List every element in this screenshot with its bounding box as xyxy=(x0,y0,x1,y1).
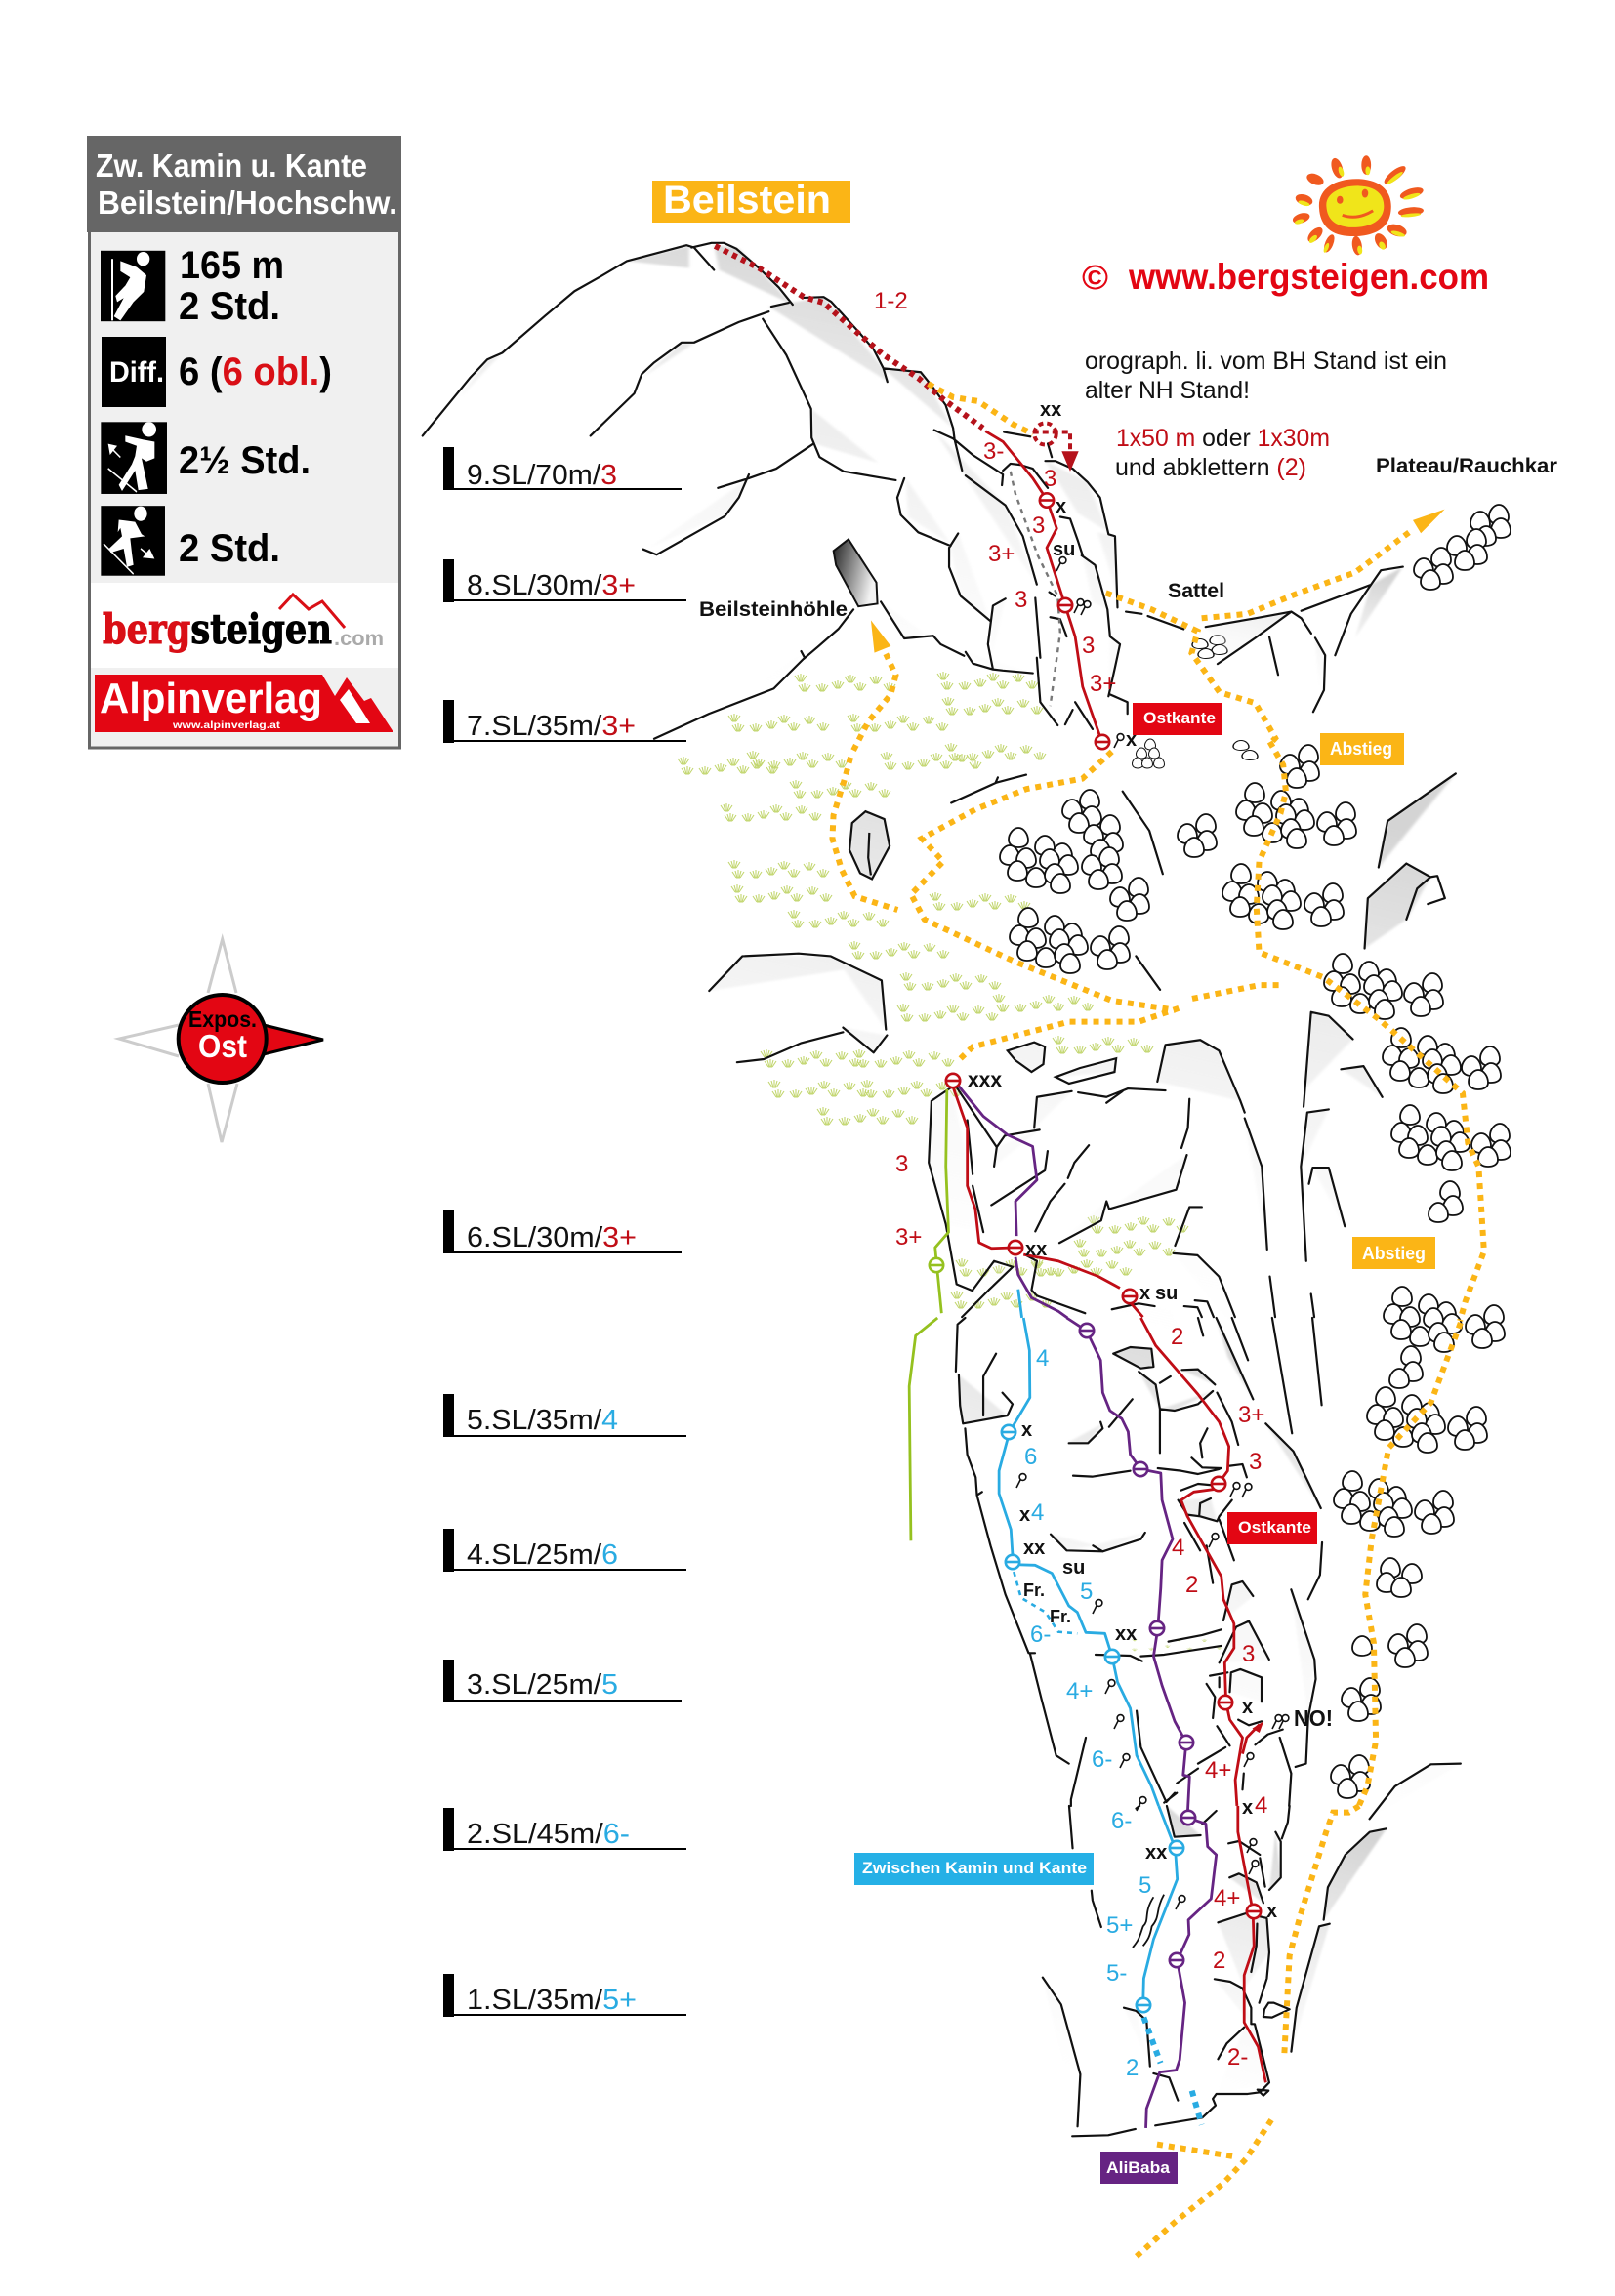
pitch 3 xyxy=(443,1660,682,1702)
blue grades: 5 xyxy=(1080,1578,1093,1605)
place labels xyxy=(699,455,1557,1731)
anchor and terrain marks: su xyxy=(1062,1557,1085,1578)
red grades: 3+ xyxy=(1090,671,1116,697)
red grades: 3 xyxy=(1249,1449,1262,1475)
tag: AliBaba: AliBaba xyxy=(1106,2158,1171,2177)
panel title: Beilstein/Hochschw. xyxy=(98,184,397,221)
grass patches xyxy=(678,672,1222,1651)
blue grades xyxy=(1024,1345,1151,2081)
route cyan start xyxy=(1018,1290,1022,1318)
icon: descent xyxy=(101,506,165,576)
icon: difficulty xyxy=(102,337,166,407)
panel title xyxy=(96,147,397,221)
red grades: 4 xyxy=(1255,1792,1267,1819)
pitch 2: 2.SL/45m/ 6- xyxy=(467,1819,630,1850)
icon: ascent xyxy=(101,422,167,494)
red grades: 2 xyxy=(1213,1948,1225,1974)
anchor and terrain marks: xx xyxy=(1115,1623,1137,1645)
route upper red xyxy=(985,431,1101,741)
anchor and terrain marks: x xyxy=(1242,1697,1253,1718)
red grades: 2 xyxy=(1185,1572,1198,1598)
compass text: Ost xyxy=(198,1028,247,1064)
note: old belay xyxy=(1085,348,1447,404)
saddle rock lines xyxy=(1106,510,1445,745)
descent time: 2 Std. xyxy=(179,527,280,570)
logo: Alpinverlag: Alpinverlag xyxy=(100,675,322,722)
cyan variant dashed xyxy=(1014,1572,1077,1633)
pitch 9 xyxy=(443,447,682,491)
red grades: 3 xyxy=(895,1151,908,1177)
path to plateau xyxy=(1202,510,1445,618)
icon: sun logo xyxy=(1292,155,1425,256)
cyan approach dots xyxy=(1143,2018,1202,2125)
compass text xyxy=(188,1006,257,1064)
red grades: 1-2 xyxy=(874,288,908,314)
compass: exposition east xyxy=(119,939,323,1142)
belay stations xyxy=(930,493,1261,2012)
boulders xyxy=(1000,505,1511,1798)
anchor and terrain marks: su xyxy=(1155,1283,1178,1304)
rappel marker xyxy=(1033,423,1079,472)
pitch 6 xyxy=(443,1210,682,1253)
blue grades: 6- xyxy=(1111,1808,1132,1834)
panel background xyxy=(90,138,400,748)
note: rappel xyxy=(1115,425,1330,481)
compass disc xyxy=(179,995,267,1083)
tag: Zwischen Kamin und Kante xyxy=(854,1853,1094,1885)
tag: Abstieg lower xyxy=(1352,1237,1435,1269)
route red middle xyxy=(951,1082,1143,1317)
difficulty value: 6 (6 obl.) xyxy=(179,350,332,393)
anchor and terrain marks: xx xyxy=(1040,399,1061,421)
pitch 8: 8.SL/30m/3+ xyxy=(467,570,636,601)
route green variant xyxy=(935,1089,948,1313)
compass east pointer xyxy=(264,1025,323,1054)
pitch 1: 1.SL/35m/5+ xyxy=(467,1985,637,2016)
anchor and terrain marks: x xyxy=(1242,1797,1253,1819)
red grades: 3 xyxy=(1082,633,1095,659)
route green lower xyxy=(909,1318,937,1540)
panel header xyxy=(87,136,401,232)
compass star points xyxy=(119,939,237,1142)
anchor and terrain marks: x xyxy=(1126,729,1137,751)
red grades: 2- xyxy=(1227,2044,1248,2070)
approach dotted paths xyxy=(832,742,1484,1321)
anchor and terrain marks: xx xyxy=(1145,1842,1167,1864)
tag: Ostkante lower xyxy=(1227,1512,1317,1544)
logo: bergsteigen.com: bergsteigen xyxy=(103,605,332,653)
anchor and terrain marks: x xyxy=(1139,1283,1150,1304)
route red base xyxy=(1238,1806,1265,2082)
logo: Alpinverlag: www.alpinverlag.at xyxy=(172,719,281,731)
red grades: 3+ xyxy=(988,541,1015,567)
red grades: 3 xyxy=(1015,587,1027,613)
tag: Zwischen Kamin und Kante: Zwischen Kamin und Kante xyxy=(862,1859,1087,1877)
tag: Abstieg lower: Abstieg xyxy=(1362,1244,1426,1263)
red grades: 4+ xyxy=(1205,1757,1231,1784)
pitch 1 xyxy=(443,1974,686,2017)
blue grades: 6- xyxy=(1092,1746,1112,1773)
logo: bergsteigen.com: .com xyxy=(334,628,384,650)
anchor and terrain marks: x xyxy=(1021,1419,1032,1441)
anchor and terrain marks: xx xyxy=(1025,1239,1047,1260)
lower rock face xyxy=(909,1318,1461,1819)
note: old belay: alter NH Stand! xyxy=(1085,377,1250,404)
climb length and time: 165 m xyxy=(180,244,284,287)
alternative grey variant xyxy=(1011,472,1060,706)
arrow to cave xyxy=(853,620,895,751)
route cyan base xyxy=(1143,1806,1178,2004)
pitch 7 xyxy=(443,700,686,743)
blue grades: 5 xyxy=(1139,1872,1151,1899)
anchor and terrain marks: Fr. xyxy=(1023,1580,1045,1600)
bolts xyxy=(1016,557,1289,1909)
pitch 2 xyxy=(443,1808,686,1851)
blue grades: 6 xyxy=(1024,1444,1037,1470)
icon: climber xyxy=(101,251,165,321)
upper rock face xyxy=(423,243,1128,751)
crack lines xyxy=(1133,1895,1164,1948)
anchor and terrain marks: Fr. xyxy=(1050,1607,1071,1626)
anchor and terrain marks: x xyxy=(1019,1504,1030,1526)
tag: Ostkante upper xyxy=(1133,703,1222,735)
anchor and terrain marks: x xyxy=(1266,1901,1277,1922)
blue grades: 2 xyxy=(1126,2055,1139,2081)
red grades: 4+ xyxy=(1214,1885,1240,1911)
logo: Alpinverlag xyxy=(95,675,393,732)
descent dotted base xyxy=(1133,1806,1359,2260)
pitch 4: 4.SL/25m/6 xyxy=(467,1539,618,1571)
info panel xyxy=(87,136,401,748)
summit ridge dotted red xyxy=(715,246,983,429)
place labels: NO! xyxy=(1294,1705,1333,1731)
blue grades: 6- xyxy=(1030,1621,1051,1648)
Beilstein cave xyxy=(834,539,878,606)
note: rappel: und abklettern (2) xyxy=(1115,454,1306,481)
place labels: Beilsteinhöhle xyxy=(699,598,848,621)
red grades xyxy=(874,288,1267,2070)
place labels: Plateau/Rauchkar xyxy=(1376,455,1557,477)
route cyan middle xyxy=(999,1318,1159,1806)
pitch 8 xyxy=(443,559,686,602)
website credit: © xyxy=(1082,259,1108,297)
red grades: 3 xyxy=(1242,1641,1255,1667)
note: rappel: 1x50 m oder 1x30m xyxy=(1116,425,1330,452)
anchor and terrain marks: su xyxy=(1053,539,1075,560)
red grades: 3 xyxy=(1044,466,1056,492)
wrong way arrow xyxy=(1242,1721,1263,1754)
red grades: 3+ xyxy=(1238,1402,1264,1428)
red grades: 3- xyxy=(983,438,1004,465)
place labels: Sattel xyxy=(1168,580,1224,602)
red grades: 4 xyxy=(1172,1535,1184,1561)
compass text: Expos. xyxy=(188,1006,257,1032)
route red lower xyxy=(1140,1318,1242,1806)
pitch 4 xyxy=(443,1529,686,1572)
blue grades: 5- xyxy=(1106,1960,1127,1987)
anchor and terrain marks: xxx xyxy=(968,1069,1002,1091)
approach time: 2½ Std. xyxy=(179,439,311,482)
blue grades: 5+ xyxy=(1106,1912,1133,1939)
pitch 5: 5.SL/35m/4 xyxy=(467,1405,618,1436)
descent dotted lower xyxy=(1359,1323,1461,1806)
climb length and time xyxy=(179,244,284,328)
middle rock face xyxy=(709,742,1484,1344)
pitch 6: 6.SL/30m/3+ xyxy=(467,1222,637,1253)
orange link to rappel xyxy=(929,384,1033,433)
blue grades: 4+ xyxy=(1066,1678,1093,1704)
pitch 3: 3.SL/25m/5 xyxy=(467,1669,618,1701)
red grades: 3+ xyxy=(895,1224,922,1250)
pitch scale xyxy=(443,447,686,2017)
descent dotted upper xyxy=(1106,593,1275,745)
panel title: Zw. Kamin u. Kante xyxy=(96,147,367,184)
anchor and terrain marks: x xyxy=(1056,496,1066,517)
route purple middle xyxy=(957,1084,1067,1318)
tag: Abstieg upper: Abstieg xyxy=(1330,739,1392,758)
pitch 9: 9.SL/70m/3 xyxy=(467,460,617,491)
blue grades: 4 xyxy=(1036,1345,1049,1372)
website credit: www.bergsteigen.com xyxy=(1128,257,1489,297)
climb length and time: 2 Std. xyxy=(179,285,280,328)
red grades: 3 xyxy=(1032,512,1045,539)
red grades: 2 xyxy=(1171,1324,1183,1350)
tag: AliBaba xyxy=(1100,2152,1178,2184)
title: Beilstein: Beilstein xyxy=(663,179,831,222)
pitch 5 xyxy=(443,1394,686,1437)
anchor and terrain marks: xx xyxy=(1023,1538,1045,1559)
pitch 7: 7.SL/35m/3+ xyxy=(467,711,636,742)
blue grades: 4 xyxy=(1031,1499,1044,1526)
base of wall xyxy=(1043,1806,1387,2260)
tag: Ostkante upper: Ostkante xyxy=(1143,709,1216,727)
route purple lower xyxy=(1067,1318,1189,1818)
route purple base xyxy=(1146,1818,1217,2128)
tag: Abstieg upper xyxy=(1320,733,1404,765)
anchor and terrain marks xyxy=(968,399,1277,1922)
logo: bergsteigen.com xyxy=(91,583,398,668)
tag: Ostkante lower: Ostkante xyxy=(1238,1518,1311,1537)
note: old belay: orograph. li. vom BH Stand ist ein xyxy=(1085,348,1447,375)
icon: difficulty: Diff. xyxy=(109,356,164,389)
